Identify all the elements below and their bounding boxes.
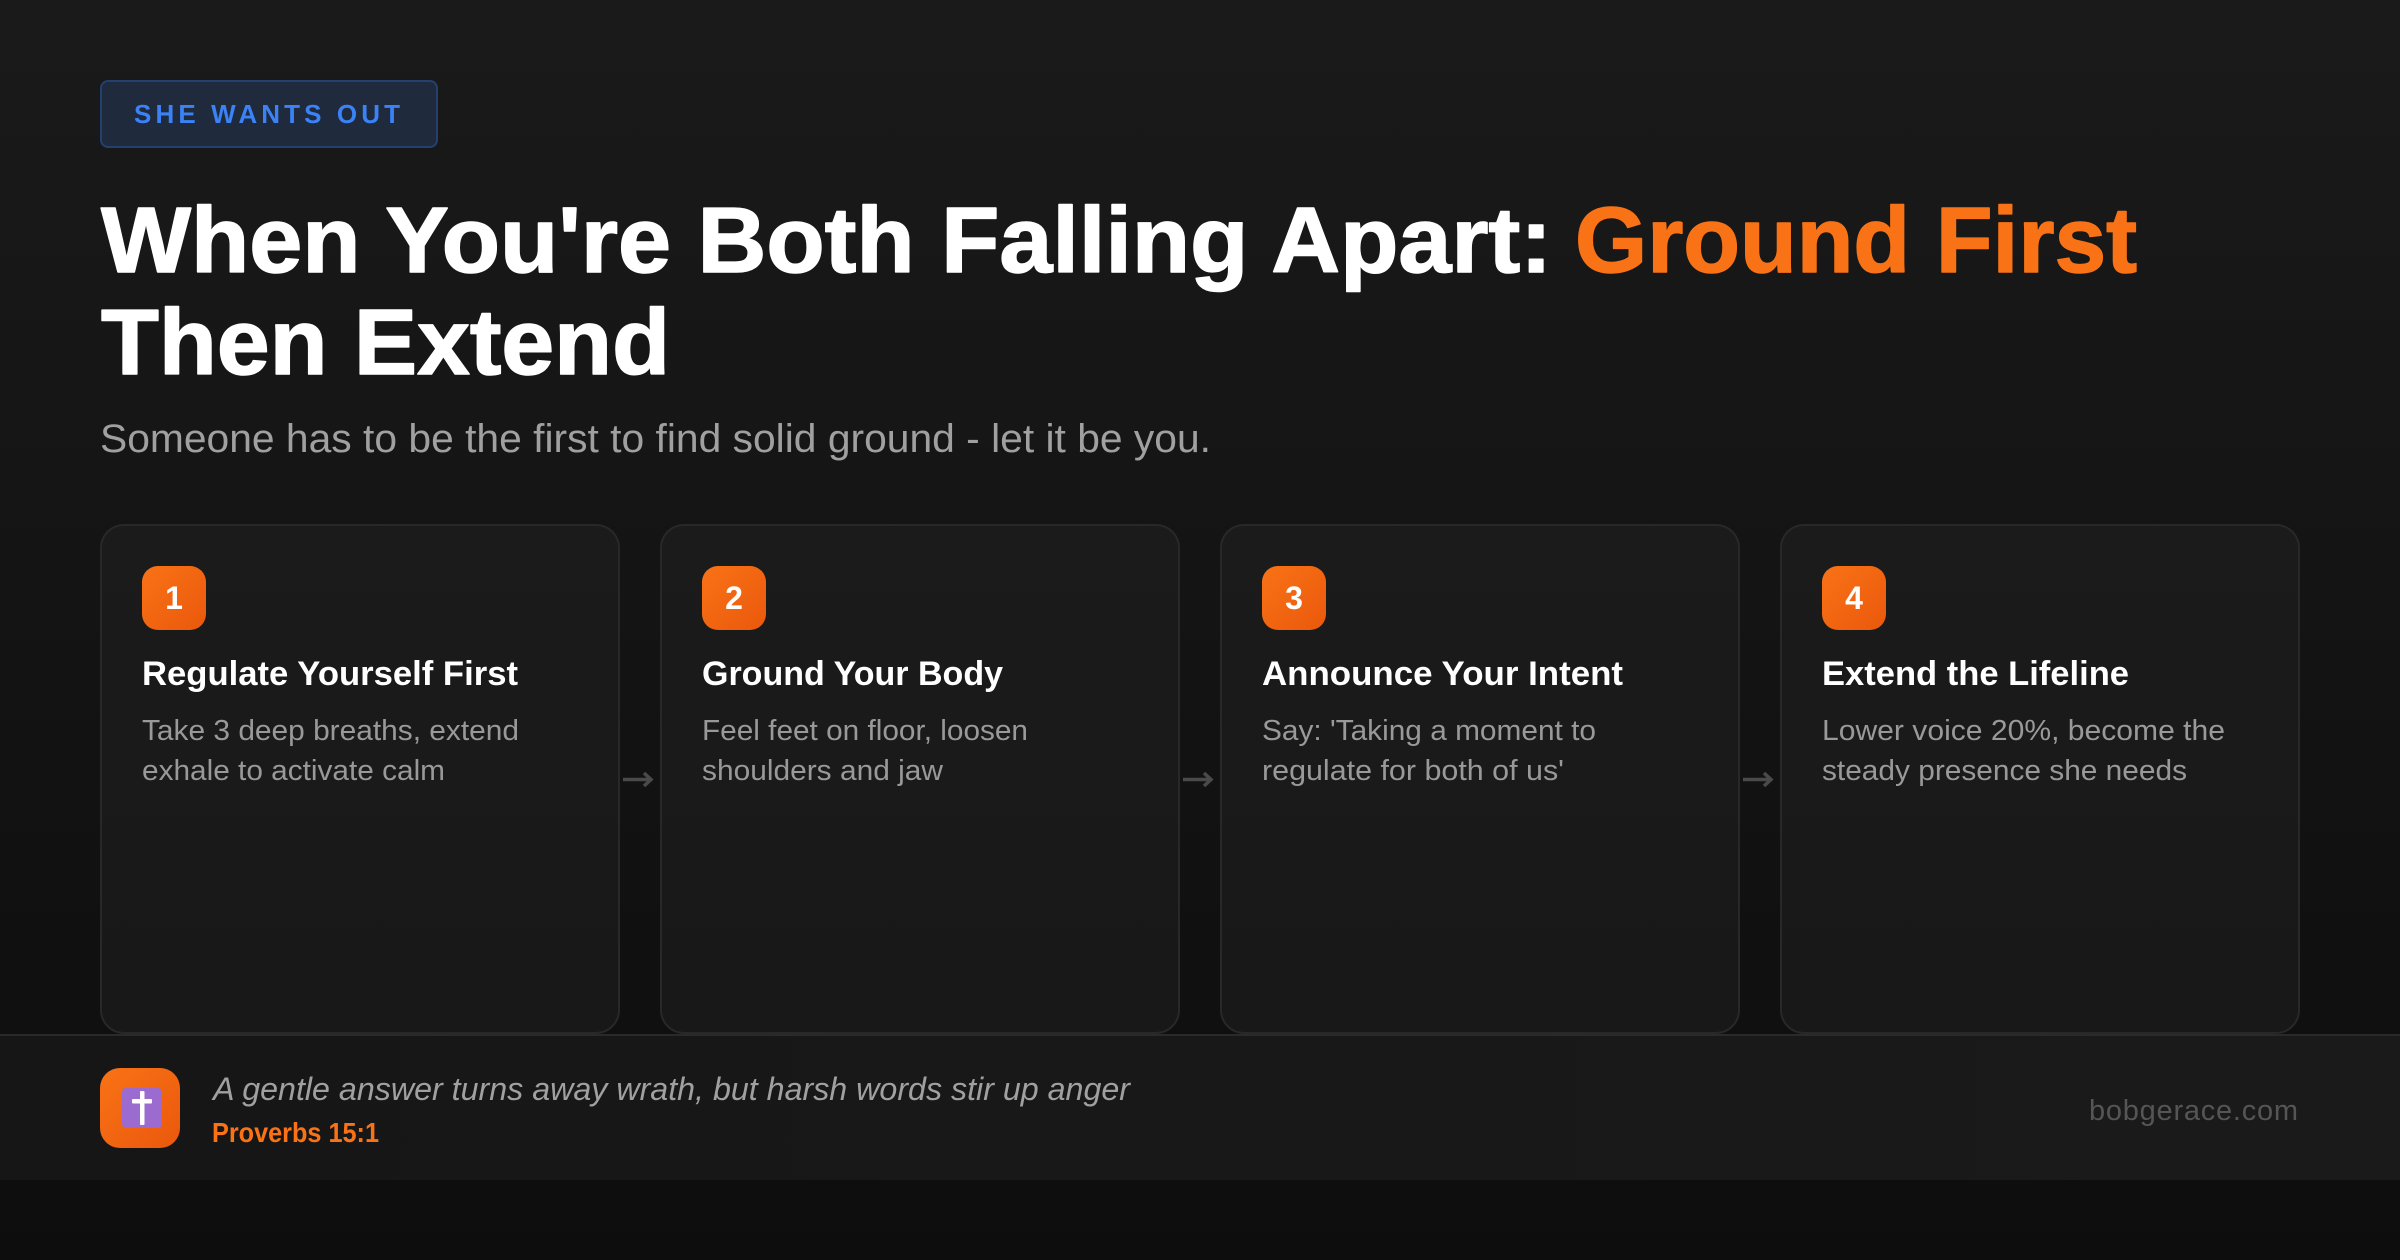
step number 1 [142,566,206,630]
title: When You're Both Falling Apart: [101,188,1552,292]
arrow 3 to 4 [1743,773,1771,786]
step description [1822,715,2225,787]
step number 1: 1 [165,580,183,616]
panel: step 4 [1781,525,2299,1033]
title [101,188,2137,394]
step number 3 [1262,566,1326,630]
step description: shoulders and jaw [702,755,944,787]
step description: Take 3 deep breaths, extend [142,715,519,747]
step description [142,715,519,787]
arrow 1 to 2 [623,773,651,786]
icon: cross [100,1068,180,1148]
step number 4 [1822,566,1886,630]
step number 2: 2 [725,580,743,616]
panel: step 2 [661,525,1179,1033]
step heading: Ground Your Body [702,655,1003,693]
step number 4: 4 [1845,580,1863,616]
step number 3: 3 [1285,580,1303,616]
scripture quote: A gentle answer turns away wrath, but harsh words stir up anger [211,1071,1131,1107]
step description: Say: 'Taking a moment to [1262,715,1596,747]
title: Ground First [1575,188,2137,292]
arrow 2 to 3 [1183,773,1211,786]
step description: regulate for both of us' [1262,755,1564,787]
category badge: SHE WANTS OUT [134,99,400,129]
category badge [101,81,437,147]
subtitle: Someone has to be the first to find solid ground - let it be you. [100,417,1211,461]
title: Then Extend [101,290,670,394]
panel: step 1 [101,525,619,1033]
step description: steady presence she needs [1822,755,2187,787]
footer bar [0,1034,2400,1180]
panel: step 3 [1221,525,1739,1033]
website: bobgerace.com [2089,1095,2298,1127]
step heading: Regulate Yourself First [142,655,518,693]
step number 2 [702,566,766,630]
step description [702,715,1028,787]
step description [1262,715,1596,787]
step description: Feel feet on floor, loosen [702,715,1028,747]
scripture reference: Proverbs 15:1 [212,1117,379,1148]
step description: exhale to activate calm [142,755,445,787]
step heading: Announce Your Intent [1262,655,1623,693]
step heading: Extend the Lifeline [1822,655,2129,693]
step description: Lower voice 20%, become the [1822,715,2225,747]
